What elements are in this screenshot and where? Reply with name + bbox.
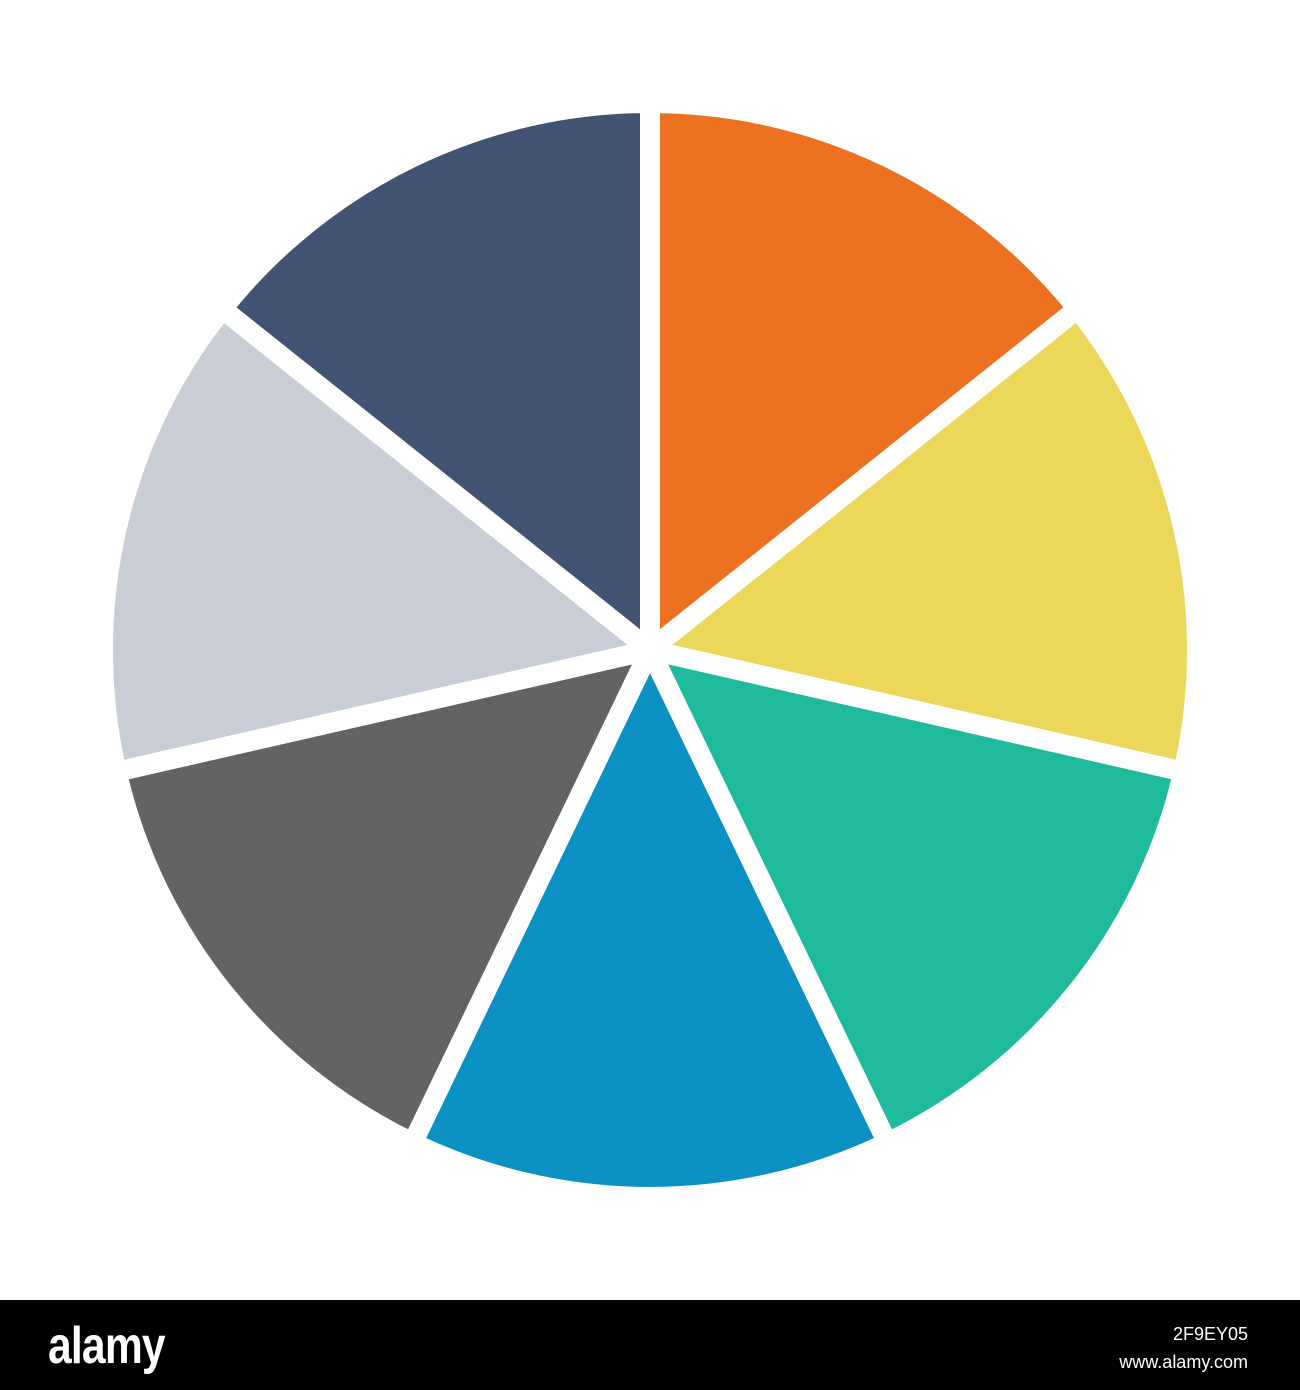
slice: navy (222, 103, 650, 650)
footer image id: www.alamy.com (1119, 1352, 1248, 1372)
slice: yellow (650, 309, 1197, 772)
slice: blue (413, 650, 887, 1197)
footer logo text: alamy (48, 1317, 165, 1375)
slice: dark gray (117, 650, 650, 1143)
footer bar (0, 1300, 1300, 1390)
slice: orange (650, 103, 1078, 650)
slice: light gray (103, 309, 650, 772)
slice: green (650, 650, 1183, 1143)
footer image id (1119, 1324, 1248, 1372)
footer image id: 2F9EY05 (1173, 1324, 1248, 1344)
